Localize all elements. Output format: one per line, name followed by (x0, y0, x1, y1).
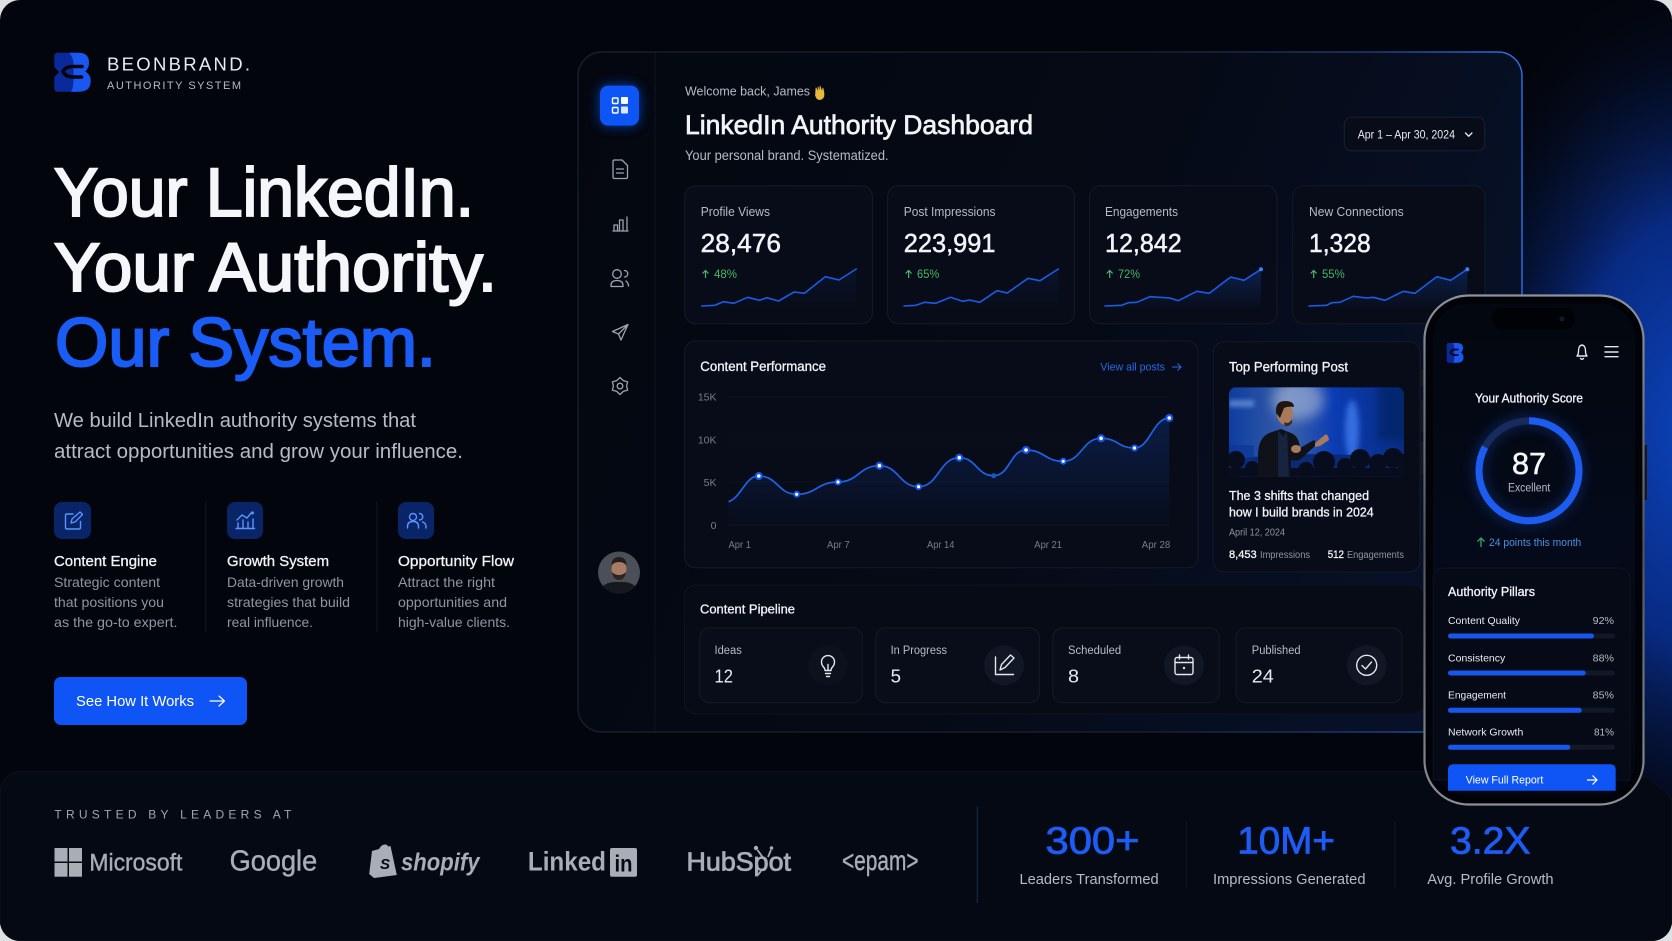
logo: Microsoft: Microsoft (89, 850, 183, 877)
icon: people (398, 502, 434, 539)
pipeline card: Published: 24 (1252, 665, 1274, 686)
headline: Your Authority. (54, 229, 497, 306)
pillar: Consistency (1448, 652, 1615, 676)
icon: waving hand (816, 86, 824, 100)
pipeline card: Ideas: Ideas (714, 645, 742, 657)
phone logo (1447, 343, 1464, 363)
stat card: New Connections: 55% (1322, 267, 1345, 281)
pipeline card: In Progress (876, 628, 1039, 703)
post title: how I build brands in 2024 (1229, 505, 1374, 520)
pipeline card: Scheduled: Scheduled (1068, 645, 1121, 657)
pipeline card: In Progress: 5 (891, 665, 901, 686)
panel: dashboard (578, 52, 1522, 732)
sparkline (702, 269, 856, 310)
stat card: Post Impressions: 223,991 (904, 228, 996, 258)
stat card: Profile Views: 48% (714, 267, 737, 281)
date selector: Apr 1 – Apr 30, 2024 (1358, 130, 1456, 142)
stat card: Post Impressions: 65% (917, 267, 940, 281)
post title: The 3 shifts that changed (1229, 488, 1369, 503)
headline (54, 154, 497, 381)
icon: bell (1577, 345, 1587, 359)
title: Opportunity Flow (398, 553, 514, 570)
stat card: Engagements: 12,842 (1105, 228, 1182, 258)
icon: check circle (1347, 645, 1387, 685)
data points (755, 414, 1173, 498)
sparkline (1309, 267, 1469, 310)
stat card: Profile Views (685, 186, 872, 324)
logo: LinkedIn: Linked (528, 847, 606, 877)
y axis labels: 10K (698, 434, 716, 446)
title: Content Engine (54, 553, 157, 570)
x axis labels: Apr 21 (1034, 539, 1062, 551)
icon: people (611, 270, 628, 286)
panel title: Content Pipeline (700, 601, 795, 616)
icon: lightbulb (808, 645, 848, 685)
logo: LinkedIn: in (614, 850, 632, 876)
arrow (210, 696, 224, 706)
icon: B mark (54, 53, 91, 92)
feature: Growth System (227, 502, 350, 630)
icon: dashboard active (600, 86, 639, 126)
pillar: Consistency: Consistency (1448, 652, 1506, 664)
button: View Full Report (1448, 764, 1616, 791)
post title (1229, 488, 1374, 520)
y axis labels (698, 392, 717, 532)
intro paragraph: We build LinkedIn authority systems that (54, 409, 416, 432)
welcome line: Welcome back, James (685, 85, 810, 99)
stat: Leaders Transformed (1020, 820, 1159, 888)
score value: 87 (1512, 446, 1546, 481)
logo: Shopify: shopify (401, 849, 480, 877)
dynamic island (1492, 308, 1575, 329)
x axis labels: Apr 1 (728, 539, 751, 551)
line chart series (728, 418, 1169, 502)
sparkline (1105, 267, 1263, 310)
post stats: Engagements (1347, 550, 1404, 561)
pillar: Content Quality (1448, 615, 1615, 638)
feature: Content Engine (54, 502, 178, 630)
pipeline card: Ideas (700, 628, 862, 703)
button: See How It Works: See How It Works (76, 693, 194, 710)
phone frame (1424, 296, 1644, 804)
stat card: Engagements: Engagements (1105, 205, 1178, 219)
pillar: Content Quality: 92% (1593, 615, 1614, 627)
stat card: New Connections: 1,328 (1309, 228, 1371, 258)
y axis labels: 5K (704, 477, 716, 489)
y axis labels: 0 (711, 520, 717, 532)
stat card: Profile Views: 28,476 (701, 228, 781, 258)
sparkline (904, 269, 1058, 310)
chart title: Content Performance (700, 359, 826, 374)
post stats: 8,453 (1229, 549, 1257, 561)
icon: growth chart (227, 502, 263, 539)
button: See How It Works (54, 677, 247, 725)
stat: Avg. Profile Growth: 3.2X (1450, 820, 1530, 862)
post date: April 12, 2024 (1229, 527, 1285, 538)
panel title: Top Performing Post (1229, 360, 1348, 375)
stat card: Engagements (1090, 186, 1277, 324)
stat: Impressions Generated: Impressions Generated (1213, 871, 1366, 888)
stat: Avg. Profile Growth (1427, 820, 1554, 888)
side buttons (1421, 370, 1647, 500)
stat: Leaders Transformed: 300+ (1046, 820, 1140, 862)
logo: Shopify: S (380, 856, 390, 873)
stat: Avg. Profile Growth: Avg. Profile Growth (1427, 871, 1554, 888)
button: View Full Report: View Full Report (1466, 774, 1543, 786)
title: Growth System (227, 553, 329, 570)
x axis labels: Apr 14 (927, 539, 955, 551)
stat card: New Connections: New Connections (1309, 205, 1404, 219)
logo: EPAM: <epam> (842, 845, 918, 876)
score heading: Your Authority Score (1475, 391, 1583, 405)
pillar: Network Growth: Network Growth (1448, 726, 1523, 738)
description: high-value clients. (398, 614, 510, 630)
pillar: Consistency: 88% (1593, 652, 1614, 664)
intro paragraph (54, 409, 463, 463)
x axis labels: Apr 7 (827, 539, 850, 551)
pillar: Engagement (1448, 689, 1615, 713)
panel title: Authority Pillars (1448, 585, 1535, 599)
stat: Impressions Generated (1213, 820, 1366, 888)
icon: pencil (984, 645, 1024, 685)
brand tagline: AUTHORITY SYSTEM (107, 80, 241, 92)
description (228, 577, 350, 627)
trusted by heading: TRUSTED BY LEADERS AT (54, 807, 292, 821)
brand name: BEONBRAND. (107, 54, 250, 74)
icon: send (612, 324, 628, 340)
pipeline card: Published: Published (1252, 645, 1301, 657)
icon: menu (1605, 347, 1618, 357)
description: as the go-to expert. (54, 614, 178, 630)
intro paragraph: attract opportunities and grow your influence. (54, 440, 463, 463)
description (54, 574, 178, 630)
score change: 24 points this month (1489, 537, 1581, 549)
description: Attract the right (398, 574, 495, 590)
logo: Google: Google (230, 846, 317, 878)
icon: edit square (54, 502, 91, 539)
pillar: Network Growth (1448, 726, 1615, 750)
logo row (54, 844, 918, 878)
feature: Opportunity Flow (398, 502, 514, 630)
stat card: Engagements: 72% (1118, 267, 1140, 281)
logo: Shopify (369, 844, 480, 878)
description: opportunities and (398, 594, 507, 610)
stat: Leaders Transformed: Leaders Transformed (1020, 871, 1159, 888)
headline: Your LinkedIn. (54, 154, 474, 231)
stat card: Profile Views: Profile Views (701, 205, 770, 219)
sidebar navigation (596, 86, 642, 596)
phone mockup (1421, 296, 1647, 804)
authority score ring (1479, 421, 1579, 521)
pillar: Engagement: Engagement (1448, 689, 1506, 701)
panel: Top Performing Post (1213, 342, 1420, 572)
date selector (1344, 117, 1485, 151)
panel: bottom band (0, 772, 1672, 941)
dashboard header (685, 85, 1485, 163)
stat card: Post Impressions (888, 186, 1074, 324)
post stats: 512 (1328, 549, 1344, 561)
link: view all posts: View all posts (1100, 362, 1165, 374)
pillar: Content Quality: Content Quality (1448, 615, 1521, 627)
x axis labels: Apr 28 (1142, 539, 1170, 551)
icon: calendar (1164, 645, 1204, 685)
panel: Authority Pillars (1433, 568, 1630, 780)
pipeline card: Published (1236, 628, 1402, 703)
post photo: speaker on stage (1215, 380, 1415, 482)
stat card: Post Impressions: Post Impressions (904, 205, 996, 219)
speaker (1258, 401, 1329, 477)
icon: bar chart (613, 217, 628, 231)
stat: Impressions Generated: 10M+ (1237, 820, 1335, 862)
pillar: Engagement: 85% (1593, 689, 1614, 701)
logo: HubSpot: HubSpot (686, 847, 792, 877)
pillar: Network Growth: 81% (1594, 726, 1614, 738)
pipeline card: Scheduled (1053, 628, 1219, 703)
post stats (1229, 549, 1404, 561)
phone screen (1433, 304, 1635, 796)
icon: document (613, 160, 628, 178)
description: that positions you (54, 594, 164, 610)
line chart area (728, 418, 1169, 525)
headline: Our System. (55, 304, 436, 381)
description: strategies that build (227, 594, 350, 610)
description: Strategic content (54, 574, 160, 590)
pipeline card: Ideas: 12 (714, 665, 733, 686)
arrow (1587, 776, 1597, 784)
panel: Content Pipeline (684, 585, 1424, 714)
x axis labels (728, 539, 1170, 551)
logo: Microsoft (54, 848, 183, 877)
description: Data-driven growth (227, 574, 344, 590)
description: real influence. (227, 614, 313, 630)
brand logo (54, 53, 250, 92)
dashboard subtitle: Your personal brand. Systematized. (685, 148, 889, 163)
post stats: Impressions (1260, 550, 1310, 561)
icon: gear (612, 378, 628, 394)
avatar (598, 552, 640, 594)
data point highlights (757, 416, 1171, 496)
pipeline card: In Progress: In Progress (891, 645, 947, 657)
stat card: New Connections (1293, 186, 1485, 324)
audience (1227, 448, 1412, 480)
y axis labels: 15K (698, 392, 716, 404)
description (398, 574, 510, 630)
panel: Content Performance chart (684, 341, 1198, 568)
score label: Excellent (1508, 483, 1551, 495)
pipeline card: Scheduled: 8 (1068, 665, 1079, 686)
dashboard title: LinkedIn Authority Dashboard (685, 110, 1033, 140)
